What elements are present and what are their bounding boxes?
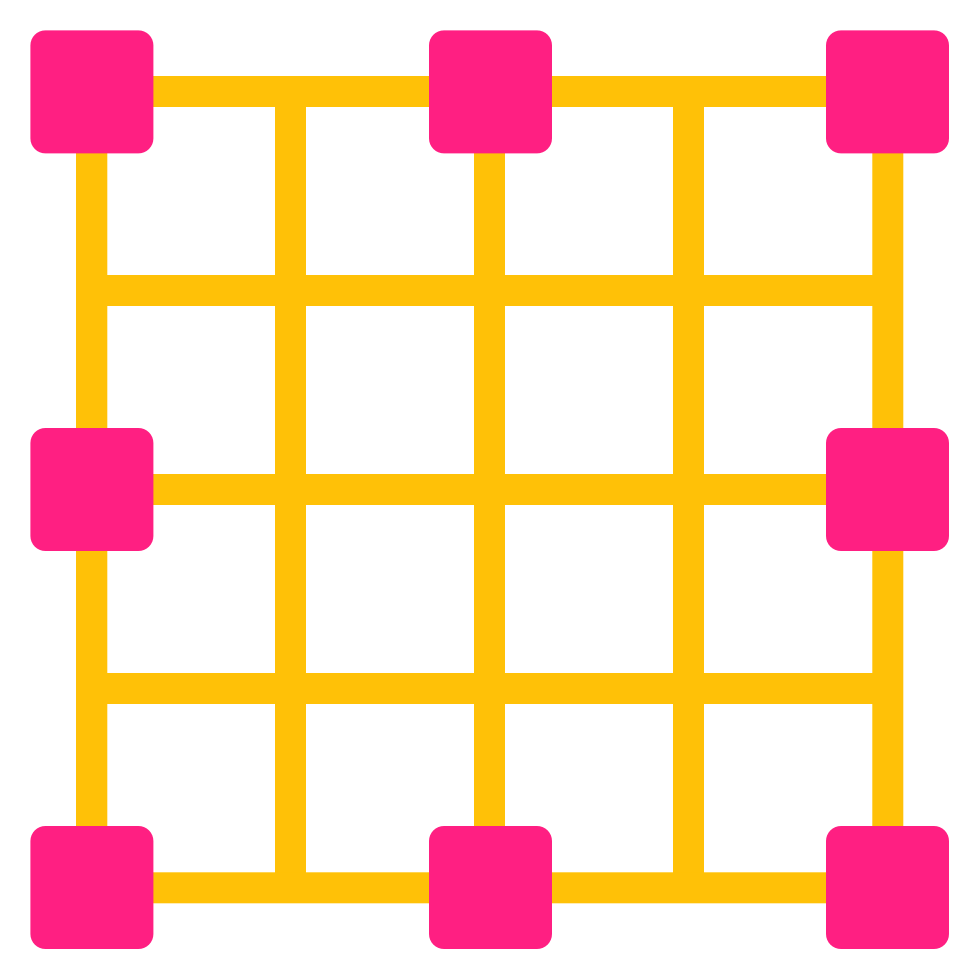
grid lines (76, 76, 903, 903)
